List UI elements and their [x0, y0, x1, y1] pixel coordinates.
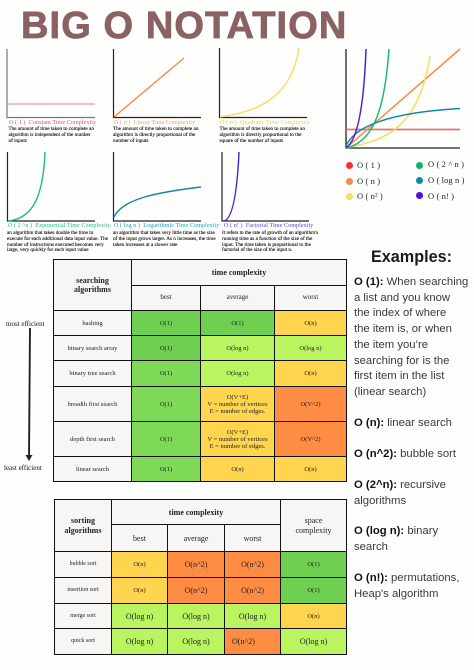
row: linear search	[53, 456, 132, 482]
description: logarithmic: an algorithm that takes very little time as the size	[113, 230, 215, 236]
caption: exponential: O ( 2 ^n ) Exponential Time Complexity	[8, 223, 111, 229]
table: searching algorithms: O(n)	[304, 466, 317, 472]
legend: O ( n! )	[428, 191, 454, 201]
row: binary search array: binary search array	[68, 344, 117, 352]
row: binary tree search	[53, 360, 132, 387]
row: merge sort	[54, 603, 112, 629]
description: constant: The amount of time taken to complete an	[8, 126, 94, 132]
caption: factorial: O ( n! ) Factorial Time Complexity	[224, 223, 313, 229]
row: binary search array	[53, 335, 132, 361]
row: insertion sort: insertion sort	[67, 587, 99, 593]
example: O(1)	[354, 276, 468, 398]
description: factorial: running time as a function of the size of the	[222, 236, 312, 242]
table: searching algorithms: worst	[303, 293, 318, 301]
description: logarithmic: of the input grows larger. As n increases, the time	[113, 236, 216, 242]
table: sorting algorithms: average	[184, 534, 208, 542]
table: sorting algorithms: O(log n)	[182, 612, 210, 620]
table: sorting algorithms: space	[305, 516, 322, 524]
table: sorting algorithms: O(log n)	[239, 612, 266, 620]
table: searching algorithms: O(V+E)	[227, 394, 248, 400]
example: O(n!)	[354, 572, 459, 600]
heading: examples: Examples:	[371, 248, 452, 266]
label: most efficient: most efficient	[6, 320, 45, 328]
header cells: algorithms	[74, 285, 111, 294]
row: bubble sort	[54, 551, 112, 578]
description: constant	[8, 126, 94, 144]
chart: exponential time	[8, 152, 95, 221]
row: depth first search: depth first search	[70, 436, 115, 442]
example: O(1): a list and you know	[354, 292, 450, 304]
table: searching algorithms: O(log n)	[226, 370, 249, 377]
table: searching algorithms: V = number of vertices	[207, 436, 268, 442]
table: searching algorithms: O(1)	[160, 320, 172, 326]
table: sorting algorithms: O(n)	[307, 612, 320, 620]
legend: O ( 2 ^ n )	[428, 159, 464, 169]
table: sorting algorithms: O(log n)	[182, 637, 210, 646]
row: breadth first search	[53, 386, 132, 422]
table: sorting algorithms: O(n^2)	[241, 560, 264, 569]
example: O(1): the item is, or when	[354, 323, 452, 335]
table: searching algorithms: O(n)	[231, 466, 244, 472]
chart: quadratic time	[220, 48, 307, 118]
table: searching algorithms: V = number of vertices	[207, 400, 268, 408]
example: O(log n)	[354, 525, 438, 553]
table: searching algorithms: E = number of edges.	[210, 442, 265, 450]
row: bubble sort: bubble sort	[70, 561, 96, 567]
description: linear: The amount of time taken to complete an	[113, 126, 198, 132]
description: factorial: It refers to the rate of growth of an algorithm's	[222, 230, 318, 236]
example: O(1): (linear search)	[354, 386, 426, 398]
chart: factorial time	[222, 152, 309, 221]
chart: constant time	[7, 49, 95, 118]
description: constant: of inputs	[8, 138, 27, 144]
table: searching algorithms: O(log n)	[299, 344, 322, 352]
row: depth first search	[53, 421, 132, 457]
caption: quadratic: O ( n²) Quadratic Time Complexity	[220, 120, 310, 126]
charts	[6, 48, 460, 222]
table: searching algorithms: O(1)	[160, 436, 172, 442]
table: searching algorithms: O(V^2)	[300, 400, 321, 408]
table: sorting algorithms: best	[133, 534, 146, 542]
row: insertion sort	[54, 577, 112, 604]
row: binary tree search: binary tree search	[69, 370, 116, 377]
description: logarithmic: taken increases at a slower rate	[113, 242, 177, 248]
table: sorting algorithms	[54, 499, 347, 655]
row: quick sort	[54, 628, 112, 655]
caption: constant: O ( 1 ) Constant Time Complexity	[9, 120, 96, 126]
arrow	[26, 328, 32, 461]
caption: linear: O ( n ) Linear Time Complexity	[114, 120, 195, 126]
description: exponential: execute for each additional data input value. The	[7, 236, 108, 242]
description: exponential: an algorithm that takes double the time to	[7, 230, 93, 236]
header cells: sorting	[71, 516, 95, 524]
chart: logarithmic time	[114, 152, 201, 221]
example: O(2^n): algorithms	[354, 495, 406, 507]
example: O(2^n): O (2^n): recursive	[354, 479, 446, 491]
table: sorting algorithms: worst	[244, 534, 261, 542]
caption: logarithmic: O ( log n ) Logarithmic Time Complexity	[114, 223, 219, 229]
table: searching algorithms: O(log n)	[226, 344, 249, 352]
table: searching algorithms: O(n)	[304, 320, 317, 326]
description: constant: algorithm is independent of the number	[8, 132, 90, 138]
table: searching algorithms	[53, 259, 347, 482]
title: BIG O NOTATION	[21, 5, 347, 47]
table: sorting algorithms: O(1)	[307, 587, 320, 594]
description: factorial: input. The time taken is proportional to the	[222, 242, 311, 248]
example: O(n!): O (n!): permutations,	[354, 572, 459, 584]
example: O(1): searching for is the	[354, 355, 449, 367]
example: O(1): first item in the list	[354, 370, 444, 382]
description: exponential: large, very quickly for each input value	[7, 247, 89, 253]
row: breadth first search: breadth first search	[68, 400, 117, 408]
chart: linear time	[114, 49, 201, 118]
table: searching algorithms: best	[160, 293, 172, 301]
description: exponential: number of instructions executed becomes very	[7, 242, 104, 248]
table: searching algorithms: O(n)	[304, 370, 317, 377]
legend: O ( n )	[357, 176, 380, 186]
description: quadratic: square of the number of inputs	[220, 138, 283, 144]
example: O(2^n)	[354, 479, 446, 507]
table: searching algorithms: O(1)	[160, 466, 172, 472]
example: O(1): O (1): When searching	[354, 276, 468, 288]
legend	[346, 159, 465, 201]
description: quadratic	[220, 126, 305, 144]
table: sorting algorithms: complexity	[296, 526, 332, 534]
description: exponential	[7, 230, 108, 253]
description: factorial: factorial of the size of the input n.	[222, 247, 292, 253]
row: hashing	[53, 310, 132, 336]
legend: O ( 1 )	[357, 160, 380, 170]
table: searching algorithms: O(V+E)	[227, 428, 248, 436]
header cells	[54, 499, 112, 552]
description: linear: number of inputs	[113, 138, 148, 144]
description: quadratic: algorithm is directly proportional to the	[220, 132, 301, 138]
table: sorting algorithms: O(log n)	[126, 637, 153, 646]
table: sorting algorithms: O(1)	[307, 561, 320, 568]
row: merge sort: merge sort	[70, 612, 96, 618]
table: sorting algorithms: O(n^2)	[185, 560, 207, 569]
table: searching algorithms: O(V^2)	[300, 436, 321, 442]
table: searching algorithms: O(1)	[160, 344, 172, 352]
example: O(n!): Heap's algorithm	[354, 588, 438, 600]
example: O(1): the index of where	[354, 307, 446, 319]
description: quadratic: The amount of time taken to complete an	[220, 126, 305, 132]
description: factorial	[222, 230, 318, 253]
table: sorting algorithms: O(log n)	[126, 612, 153, 620]
legend: O ( n² )	[357, 191, 383, 201]
header cells: algorithms	[65, 526, 101, 534]
table: searching algorithms: O(1)	[160, 400, 172, 408]
table: sorting algorithms: O(n^2)	[185, 586, 207, 595]
example: O(log n): O (log n): binary	[354, 525, 438, 537]
example: O(n^2): O (n^2): bubble sort	[354, 448, 456, 460]
header cells	[53, 259, 132, 311]
table: sorting algorithms: O(n^2)	[232, 637, 255, 646]
row: linear search: linear search	[76, 466, 109, 472]
description: logarithmic	[113, 230, 216, 248]
table: searching algorithms: O(1)	[160, 370, 172, 377]
table: searching algorithms: O(1)	[231, 320, 244, 326]
description: linear	[113, 126, 198, 144]
example: O(n): O (n): linear search	[354, 417, 452, 429]
chart: combined comparison	[346, 49, 460, 148]
table: searching algorithms: average	[227, 293, 248, 301]
table: searching algorithms: time complexity	[212, 268, 266, 277]
row: quick sort: quick sort	[71, 638, 95, 644]
example: O(log n): search	[354, 541, 388, 553]
table: sorting algorithms: O(n)	[133, 587, 146, 594]
description: linear: algorithm is directly proportional of the	[113, 132, 195, 138]
table: sorting algorithms: O(n^2)	[241, 586, 264, 595]
table: sorting algorithms: O(log n)	[300, 637, 327, 646]
legend: O ( log n )	[428, 175, 465, 185]
header cells: searching	[76, 276, 109, 284]
table: sorting algorithms: time complexity	[169, 508, 223, 516]
label: least efficient: least efficient	[4, 464, 42, 472]
table: sorting algorithms: O(n)	[133, 561, 146, 568]
table: searching algorithms: E = number of edges.	[210, 408, 265, 414]
row: hashing: hashing	[82, 320, 103, 326]
example: O(1): the item you’re	[354, 339, 428, 351]
efficiency arrow	[4, 320, 45, 472]
